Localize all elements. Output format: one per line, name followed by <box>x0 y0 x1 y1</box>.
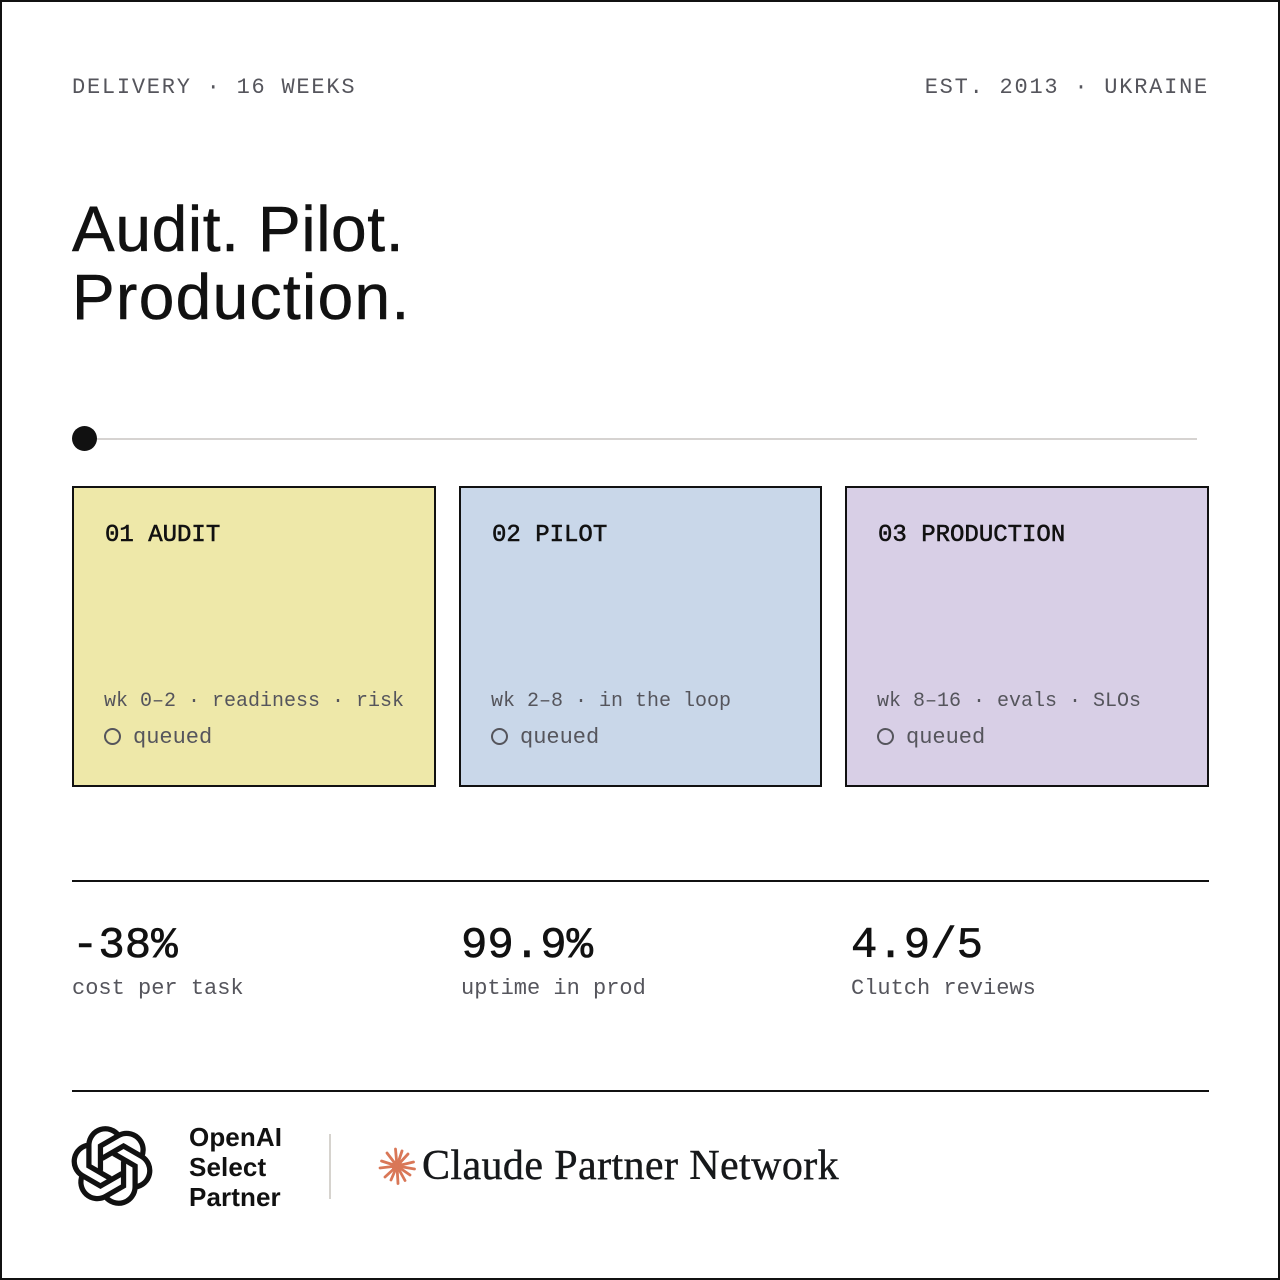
stat label: cost per task <box>72 976 244 1001</box>
card details: wk 0–2 · readiness · risk <box>104 690 404 713</box>
stat value: -38% <box>72 921 178 971</box>
panel: 03 production <box>845 486 1209 787</box>
title <box>72 193 411 333</box>
status icon <box>491 728 508 745</box>
panel: 02 pilot <box>459 486 822 787</box>
stat: uptime <box>461 921 646 1001</box>
header left label: DELIVERY · 16 WEEKS <box>72 75 356 100</box>
stat value: 4.9/5 <box>851 921 983 971</box>
icon: openai logo <box>72 1126 152 1206</box>
stat label: uptime in prod <box>461 976 646 1001</box>
header right label: EST. 2013 · UKRAINE <box>925 75 1209 100</box>
stat: cost per task <box>72 921 244 1001</box>
title: Production. <box>72 261 411 333</box>
status icon <box>104 728 121 745</box>
openai select partner text: OpenAI <box>189 1122 282 1152</box>
stat: clutch reviews <box>851 921 1036 1001</box>
timeline track <box>84 438 1197 440</box>
panel: 01 audit <box>72 486 436 787</box>
card details: wk 2–8 · in the loop <box>491 690 731 713</box>
icon: claude starburst <box>378 1148 416 1185</box>
card heading: 01 AUDIT <box>105 522 220 549</box>
card details: wk 8–16 · evals · SLOs <box>877 690 1141 713</box>
card heading: 03 PRODUCTION <box>878 522 1065 549</box>
status text: queued <box>906 725 985 750</box>
stat label: Clutch reviews <box>851 976 1036 1001</box>
timeline marker <box>72 426 97 451</box>
card heading: 02 PILOT <box>492 522 607 549</box>
status text: queued <box>520 725 599 750</box>
status icon <box>877 728 894 745</box>
claude partner network wordmark: Claude Partner Network <box>422 1143 839 1189</box>
status text: queued <box>133 725 212 750</box>
stat value: 99.9% <box>461 921 593 971</box>
openai select partner text: Select <box>189 1152 266 1182</box>
title: Audit. Pilot. <box>72 193 404 265</box>
openai select partner text <box>189 1122 282 1212</box>
openai select partner text: Partner <box>189 1182 281 1212</box>
